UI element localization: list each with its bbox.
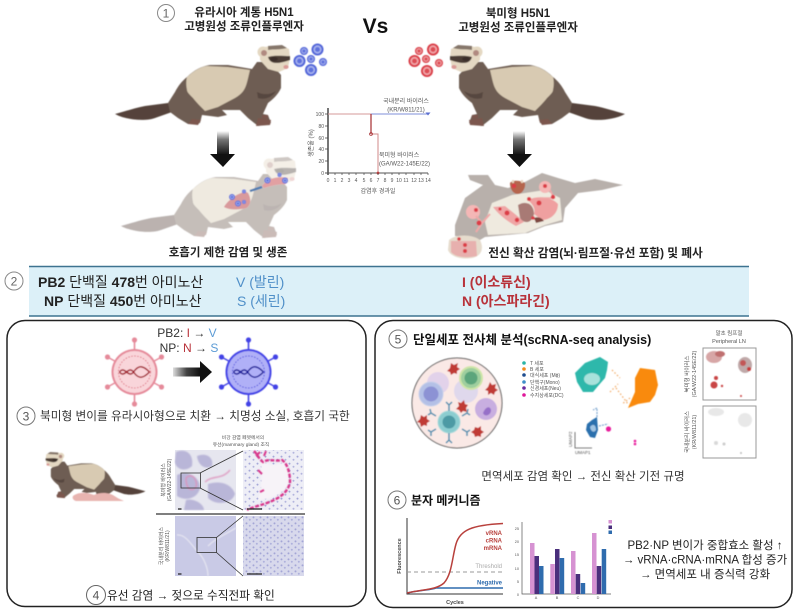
x axis tick labels: 11 [403,178,409,184]
PCR curve chart: Cycles [446,600,464,606]
histology: uninfected mammary tissue [175,516,304,576]
bar chart: 5 [517,580,519,584]
y axis tick labels: 100 [316,112,324,118]
UMAP plot [568,357,658,455]
panel: mutation substitution and vertical transmission [7,320,366,606]
x axis tick labels: 3 [348,178,351,184]
legend: cell types: 단핵구(Mono) [530,379,560,386]
survival chart: 생존율 (%) [307,129,315,157]
panel 2: amino acid comparison band: 2 [11,274,18,288]
bar chart: C [577,596,580,600]
y axis tick labels: 20 [318,159,324,165]
caption 4 [86,586,275,604]
PCR curve chart [397,518,503,606]
bar chart: 10 [515,567,519,571]
arrow: left down [210,131,235,167]
y axis tick labels: 40 [318,147,324,153]
survival chart: (KR/W811/21) [387,108,425,114]
survival chart: 북미형 바이러스 [379,151,420,159]
bar chart [515,520,612,600]
rotated histology labels: (GA/W22-145E/22) [167,458,173,501]
caption: systemic infection: 전신 확산 감염(뇌·림프절·유선 포함) 및 폐사 [488,246,703,260]
mechanism text [623,538,788,581]
caption 4: 유선 감염 → 젖으로 수직전파 확인 [107,590,275,602]
header: Eurasian H5N1: 유라시아 계통 H5N1 [194,5,294,19]
mutation labels: NP: N → S [160,341,218,355]
legend: cell types [522,360,564,399]
x axis tick labels: 6 [370,178,373,184]
bar chart: B [556,596,559,600]
peripheral LN plots: 말초 림프절 [716,329,742,337]
peripheral LN plots: 북미형 바이러스 [683,356,691,392]
x axis tick labels: 1 [334,178,337,184]
peripheral LN plots [683,329,756,458]
mechanism text: → vRNA·cRNA·mRNA 합성 증가 [623,554,788,566]
PCR curve chart: Threshold [475,564,502,570]
header: Eurasian H5N1: 1 [163,6,170,20]
header: North American H5N1 [458,6,578,34]
x axis tick labels: 12 [411,178,417,184]
heading 6: 분자 메커니즘 [411,492,481,508]
mutation labels [157,326,218,355]
icon: red virus [105,337,164,407]
heading 6 [388,491,481,509]
mechanism text: → 면역세포 내 증식력 강화 [640,568,770,581]
peripheral LN plots: Peripheral LN [712,339,746,345]
histology: infected mammary tissue [175,450,304,510]
survival chart [307,97,431,195]
bar chart: 15 [515,553,519,557]
x axis tick labels: 2 [341,178,344,184]
PCR curve chart: vRNA [486,531,503,537]
rotated histology labels: 국내분리 바이러스 [158,527,165,565]
caption 3 [17,407,350,425]
illustration: nursing ferret with kits [46,452,145,501]
panel: single-cell analysis and molecular mechanism [375,320,792,608]
arrow: right down [507,131,532,167]
PCR curve chart: cRNA [486,538,503,544]
legend: cell types: T 세포 [530,360,544,367]
histology header: 비강 감염 페렛에서의 [222,434,264,441]
illustration: North American ferret with red viruses [408,44,625,126]
UMAP plot: UMAP1 [575,450,591,455]
bar chart: A [535,596,538,600]
bar chart: 25 [515,527,519,531]
legend: cell types: 대식세포 (Mϕ) [530,372,560,379]
panel 2: amino acid comparison band: PB2 단백질 478번 아미노산 [38,274,203,290]
versus label: Vs [363,15,388,38]
x axis tick labels: 10 [396,178,402,184]
UMAP plot: UMAP2 [568,431,573,447]
rotated histology labels [158,458,173,565]
survival chart: 감염후 경과일 [361,187,395,195]
x axis tick labels: 0 [327,178,330,184]
header: Eurasian H5N1: 고병원성 조류인플루엔자 [184,19,304,33]
rotated histology labels: (KR/W811/21) [165,530,171,562]
heading 5: 단일세포 전사체 분석(scRNA-seq analysis) [413,333,651,347]
PCR curve chart: mRNA [484,546,503,552]
icon: blue virus [219,337,278,407]
illustration: dead ferret with systemic infection [448,173,623,259]
heading 5: 5 [395,332,402,346]
panel 2: amino acid comparison band: N (아스파라긴) [462,293,550,309]
y axis tick labels: 0 [321,171,324,177]
illustration: immune cells in a circle [412,358,502,448]
histology zoom markers [156,451,305,576]
x axis tick labels: 8 [384,178,387,184]
bar chart: 20 [515,540,519,544]
y axis tick labels [316,112,324,177]
rotated histology labels: 북미형 바이러스 [160,463,167,497]
PCR curve chart: Fluorescence [397,538,403,574]
mechanism text: PB2·NP 변이가 중합효소 활성 ↑ [627,538,783,552]
header: North American H5N1: 북미형 H5N1 [486,6,551,20]
caption 4: 4 [93,588,100,602]
header: North American H5N1: 고병원성 조류인플루엔자 [458,20,578,34]
x axis tick labels: 13 [418,178,424,184]
x axis tick labels: 9 [391,178,394,184]
heading 6: 6 [394,494,401,508]
PCR curve chart: Negative [477,580,503,586]
caption 5: 면역세포 감염 확인 → 전신 확산 기전 규명 [481,470,685,483]
peripheral LN plots: 국내분리 바이러스 [683,411,691,453]
x axis tick labels: 7 [377,178,380,184]
illustration: Eurasian ferret with blue viruses [115,44,327,126]
bar chart: D [597,596,600,600]
panel 2: amino acid comparison band: V (발린) [236,274,284,290]
mutation labels: PB2: I → V [157,326,217,340]
panel 2: amino acid comparison band [5,266,749,316]
x axis tick labels: 5 [363,178,366,184]
arrow: red to blue virus [173,361,212,383]
peripheral LN plots: (GA/W22-145E/22) [692,350,698,397]
header: Eurasian H5N1 [158,4,304,33]
bar chart: 0 [517,593,519,597]
x axis tick labels: 14 [425,178,431,184]
survival chart: (GA/W22-145E/22) [379,162,430,168]
legend: cell types: 신경세포(Neu) [530,385,561,392]
x axis tick labels: 4 [355,178,358,184]
y axis tick labels: 60 [318,136,324,142]
legend: cell types: 수지상세포(DC) [530,392,564,399]
caption 3: 북미형 변이를 유라시아형으로 치환 → 치명성 소실, 호흡기 국한 [40,409,350,423]
legend: cell types: B 세포 [530,366,544,373]
caption 3: 3 [23,410,30,424]
caption: respiratory-limited infection: 호흡기 제한 감염 및 생존 [169,245,288,259]
histology header [213,434,269,448]
histology header: 유선(mammary gland) 조직 [213,441,269,448]
y axis tick labels: 80 [318,124,324,130]
survival chart: 국내분리 바이러스 [383,97,429,105]
illustration: pale ferret with infected respiratory tract [121,157,296,238]
peripheral LN plots: (KR/W811/21) [692,415,698,449]
panel 2: amino acid comparison band: S (세린) [237,293,285,309]
panel 2: amino acid comparison band: NP 단백질 450번 아미노산 [44,293,202,309]
panel 2: amino acid comparison band: I (이소류신) [462,274,531,290]
